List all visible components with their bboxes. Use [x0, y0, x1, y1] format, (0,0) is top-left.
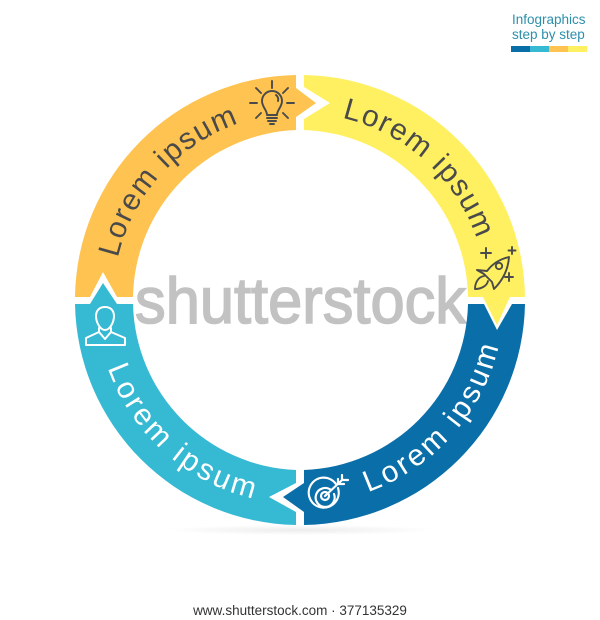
- ground shadow: [165, 525, 435, 535]
- blue arrow shape: [283, 304, 525, 525]
- yellow label: Lorem ipsum: [344, 98, 490, 236]
- legend title: Infographics: [512, 12, 586, 27]
- panel: blue segment: [283, 304, 525, 525]
- panel: cyan segment: [75, 283, 296, 525]
- panel: yellow segment: [304, 75, 525, 325]
- icon: light bulb: [250, 81, 294, 124]
- cyan label: Lorem ipsum: [108, 362, 254, 498]
- legend title: step by step: [512, 27, 585, 42]
- icon: target: [309, 475, 348, 508]
- orange label: Lorem ipsum: [98, 110, 236, 256]
- cyan arrow shape: [75, 283, 296, 525]
- legend colour bar: [511, 46, 587, 52]
- icon: person: [86, 307, 125, 345]
- yellow arrow shape: [304, 75, 525, 325]
- footer credit: www.shutterstock.com · 377135329: [192, 603, 407, 618]
- icon: rocket: [475, 247, 516, 289]
- panel: orange segment: [75, 75, 316, 297]
- blue label: Lorem ipsum: [362, 345, 498, 492]
- watermark: shutterstock: [135, 264, 466, 337]
- orange arrow shape: [75, 75, 316, 297]
